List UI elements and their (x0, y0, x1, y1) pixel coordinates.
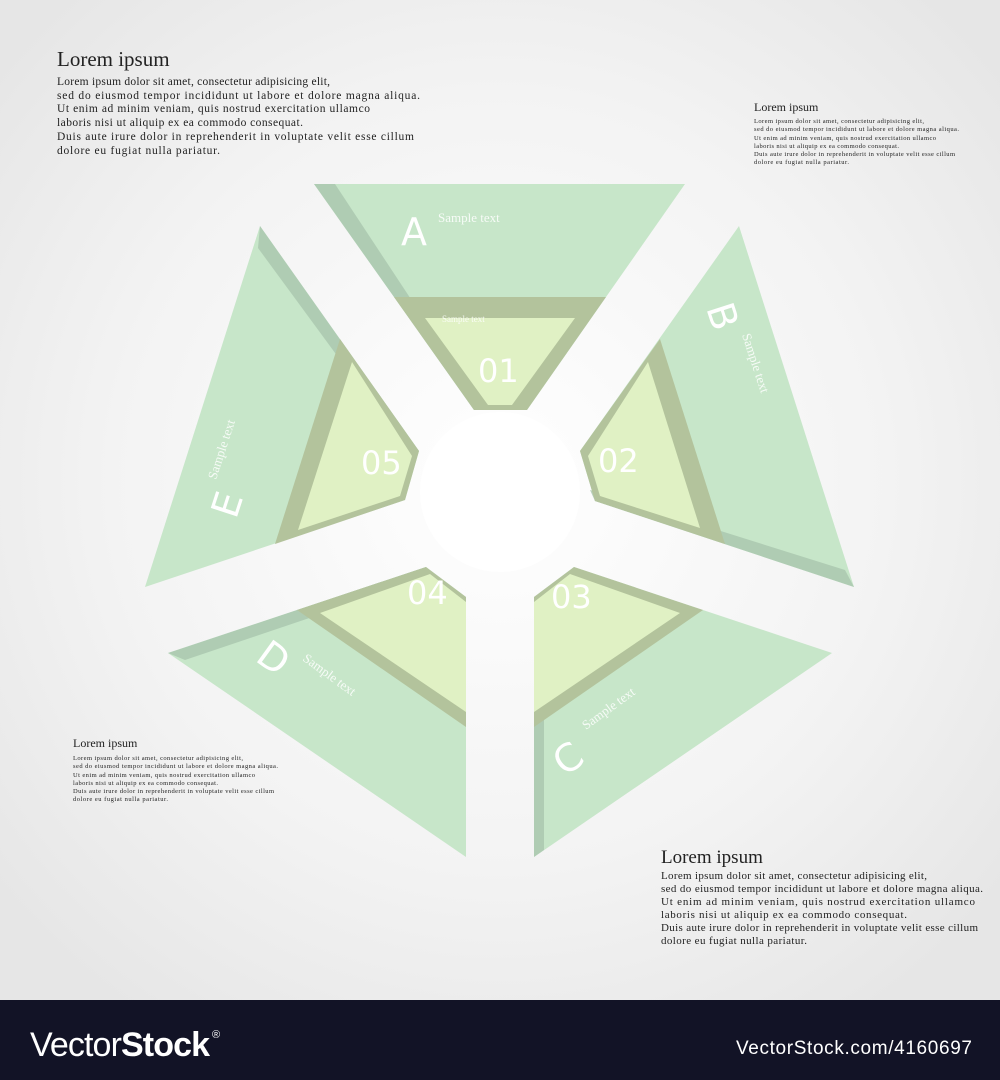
segment A (314, 184, 685, 410)
segment C: 03 (551, 578, 592, 616)
segment A: Sample text (438, 210, 500, 225)
segment D: D (249, 632, 298, 684)
pentagon diagram (145, 184, 854, 857)
segment B (580, 226, 854, 587)
segment D (168, 567, 466, 857)
text block: bottom-right: sed do eiusmod tempor incididunt ut labore et dolore magna aliqua. (661, 883, 983, 895)
segment E: E (203, 486, 252, 523)
text block: top-left: Lorem ipsum (57, 47, 170, 71)
text block: top-right: dolore eu fugiat nulla pariatur. (754, 159, 849, 166)
text block: top-right: Duis aute irure dolor in reprehenderit in voluptate velit esse cillum (754, 151, 955, 158)
footer bar: ® (212, 1029, 220, 1041)
text block: bottom-left: Ut enim ad minim veniam, quis nostrud exercitation ullamco (73, 772, 255, 779)
text block: bottom-right (661, 847, 986, 947)
segment D: 04 (407, 574, 448, 612)
segment B: Sample text (739, 331, 773, 395)
text block: bottom-right: laboris nisi ut aliquip ex ea commodo consequat. (661, 909, 907, 921)
segment E: Sample text (205, 417, 238, 481)
text block: bottom-left: dolore eu fugiat nulla pariatur. (73, 796, 168, 803)
text block: bottom-right: Duis aute irure dolor in reprehenderit in voluptate velit esse cillum (661, 922, 978, 934)
segment A: 01 (478, 352, 519, 390)
segment C: Sample text (579, 684, 638, 732)
text block: bottom-right: Lorem ipsum dolor sit amet, consectetur adipisicing elit, (661, 870, 927, 882)
segment A: Sample text (442, 314, 485, 324)
segment E: 05 (361, 444, 402, 482)
segment A: A (401, 210, 427, 254)
segment B: B (697, 297, 747, 336)
segment B: 02 (598, 442, 639, 480)
text block: top-left: dolore eu fugiat nulla pariatur. (57, 145, 220, 157)
segment D: Sample text (300, 650, 359, 699)
text block: bottom-right: Ut enim ad minim veniam, quis nostrud exercitation ullamco (661, 896, 976, 908)
text block: bottom-right: dolore eu fugiat nulla pariatur. (661, 935, 807, 947)
text block: top-left: Lorem ipsum dolor sit amet, consectetur adipisicing elit, (57, 76, 330, 88)
center circle (420, 412, 580, 572)
text block: top-left: Duis aute irure dolor in reprehenderit in voluptate velit esse cillum (57, 131, 414, 143)
segment C (534, 567, 832, 857)
text block: top-right (754, 100, 961, 166)
footer bar: VectorStock (30, 1026, 210, 1064)
segment C: C (544, 733, 592, 784)
text block: top-right: Lorem ipsum (754, 100, 819, 114)
text block: bottom-left: Duis aute irure dolor in reprehenderit in voluptate velit esse cillum (73, 788, 274, 795)
segment E (145, 226, 419, 587)
text block: top-left: sed do eiusmod tempor incididunt ut labore et dolore magna aliqua. (57, 90, 420, 102)
text block: bottom-left: Lorem ipsum dolor sit amet, consectetur adipisicing elit, (73, 755, 243, 762)
footer bar: VectorStock.com/4160697 (736, 1038, 972, 1059)
text block: top-right: Ut enim ad minim veniam, quis nostrud exercitation ullamco (754, 135, 936, 142)
text block: bottom-right: Lorem ipsum (661, 847, 763, 868)
footer bar (0, 1000, 1000, 1080)
text block: top-right: Lorem ipsum dolor sit amet, consectetur adipisicing elit, (754, 118, 924, 125)
text block: top-right: sed do eiusmod tempor incididunt ut labore et dolore magna aliqua. (754, 126, 959, 133)
text block: top-left: Ut enim ad minim veniam, quis nostrud exercitation ullamco (57, 103, 370, 115)
text block: bottom-left (73, 736, 280, 803)
text block: top-right: laboris nisi ut aliquip ex ea commodo consequat. (754, 143, 899, 150)
text block: bottom-left: laboris nisi ut aliquip ex ea commodo consequat. (73, 780, 218, 787)
text block: top-left: laboris nisi ut aliquip ex ea commodo consequat. (57, 117, 303, 129)
text block: bottom-left: sed do eiusmod tempor incididunt ut labore et dolore magna aliqua. (73, 763, 278, 770)
text block: top-left (57, 47, 424, 157)
text block: bottom-left: Lorem ipsum (73, 736, 138, 750)
